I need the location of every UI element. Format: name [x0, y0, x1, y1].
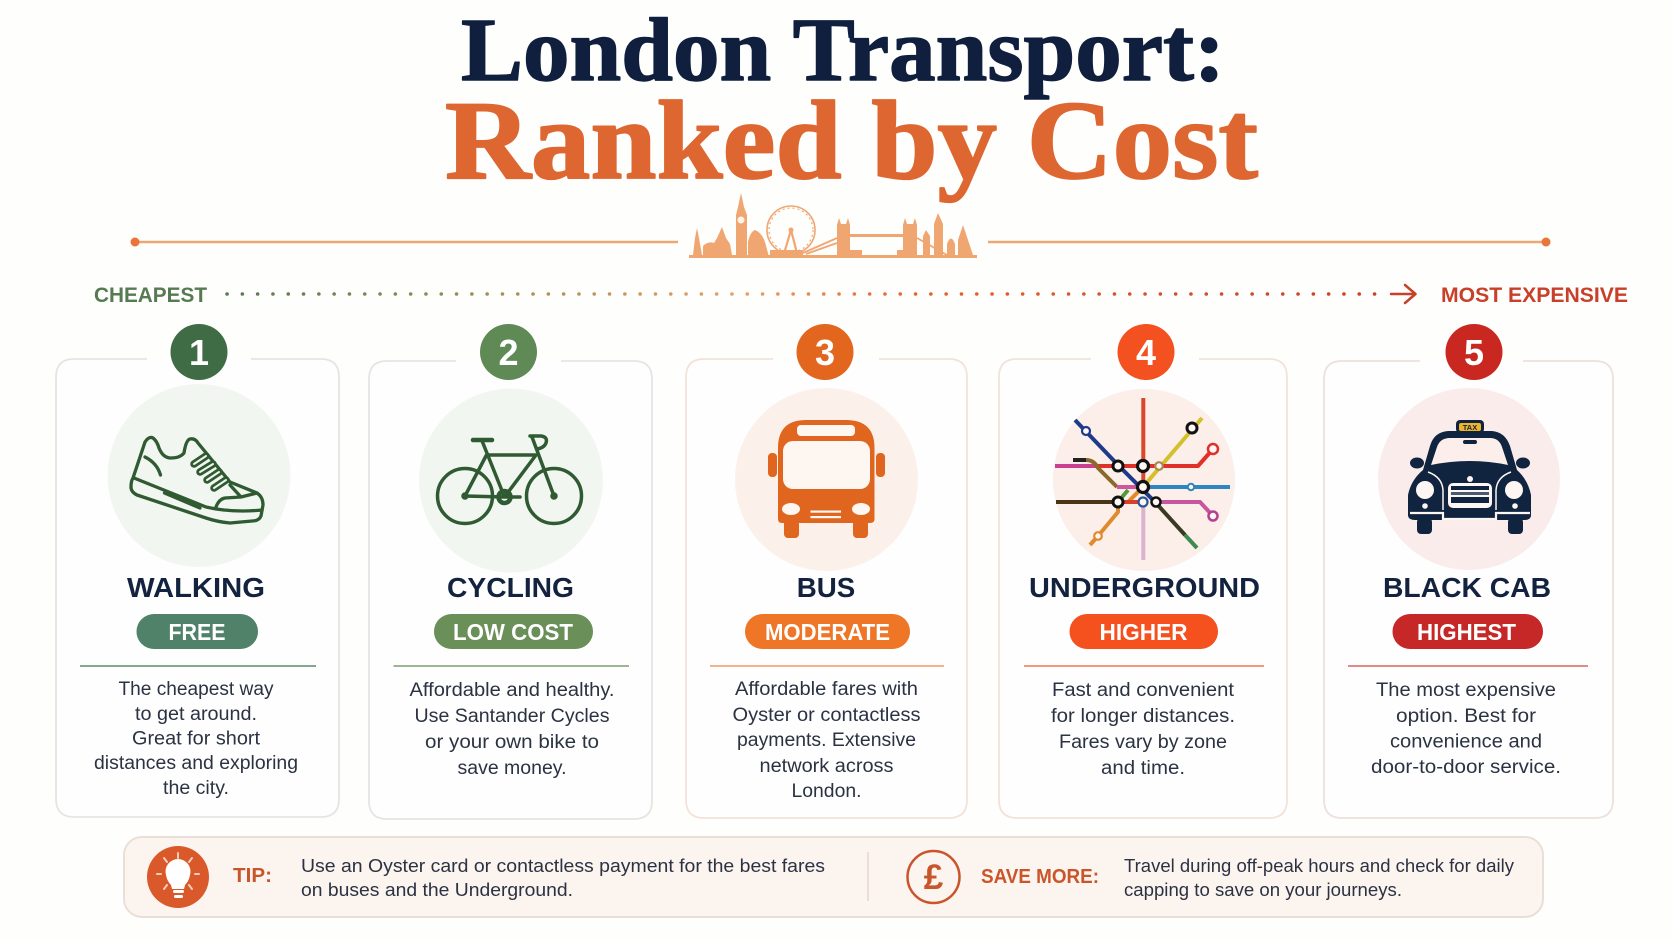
- panel: black cab: 5: [1464, 332, 1484, 373]
- icon: tube map: [1055, 398, 1230, 560]
- panel: bus: 3: [815, 332, 835, 373]
- tip text: Use an Oyster card or contactless payment for the best fares: [301, 855, 825, 876]
- icon: bus: [768, 420, 885, 538]
- panel: black cab: [1324, 324, 1613, 818]
- cost scale: CHEAPEST: [94, 283, 207, 307]
- tip text: on buses and the Underground.: [301, 879, 573, 900]
- cost pill: [745, 614, 910, 649]
- cost pill: HIGHEST: [1417, 619, 1516, 645]
- panel: walking: 1: [189, 332, 209, 373]
- panel: walking: [56, 324, 339, 817]
- cost pill: [1392, 614, 1543, 649]
- panel: tips: TIP:: [233, 865, 272, 887]
- description: option. Best for: [1396, 706, 1537, 727]
- title: London Transport:: [461, 1, 1225, 100]
- panel: cycling: 2: [498, 332, 519, 373]
- save more text: capping to save on your journeys.: [1124, 879, 1402, 900]
- cost pill: [136, 614, 258, 649]
- cost pill: [434, 614, 593, 649]
- description: or your own bike to: [425, 732, 599, 753]
- icon: taxi: [1408, 420, 1531, 534]
- description: save money.: [458, 758, 566, 779]
- description: Fares vary by zone: [1059, 732, 1227, 753]
- cost pill: [1070, 614, 1218, 649]
- icon: London skyline: [689, 193, 977, 258]
- panel: underground: 4: [1136, 332, 1156, 373]
- panel: cycling: CYCLING: [447, 572, 574, 603]
- description: Fast and convenient: [1052, 680, 1235, 701]
- description: Use Santander Cycles: [414, 706, 610, 727]
- panel: underground: [999, 324, 1287, 818]
- description: and time.: [1101, 758, 1185, 779]
- title: [445, 1, 1258, 203]
- divider with skyline: [130, 193, 1550, 258]
- panel: walking: WALKING: [127, 572, 265, 603]
- tip text: [301, 855, 825, 900]
- description: The cheapest way: [118, 679, 274, 700]
- description: door-to-door service.: [1371, 757, 1561, 778]
- description: Oyster or contactless: [732, 705, 920, 726]
- description: [732, 679, 920, 802]
- description: network across: [760, 756, 894, 777]
- panel: underground: UNDERGROUND: [1029, 572, 1260, 603]
- tube stations: [1082, 423, 1218, 540]
- description: convenience and: [1390, 732, 1542, 752]
- description: for longer distances.: [1051, 706, 1235, 727]
- cost pill: FREE: [168, 619, 226, 645]
- cost pill: LOW COST: [453, 619, 573, 645]
- cost pill: MODERATE: [765, 619, 890, 645]
- icon: taxi: TAX: [1463, 423, 1477, 432]
- panel: tips: [124, 837, 1543, 917]
- description: the city.: [163, 778, 229, 799]
- description: distances and exploring: [94, 753, 298, 774]
- icon: light bulb: [147, 846, 209, 908]
- icon: pound: £: [924, 858, 944, 897]
- icon: bicycle: [438, 436, 582, 524]
- description: London.: [792, 781, 862, 802]
- description: [94, 679, 298, 799]
- save more text: [1124, 855, 1515, 900]
- description: [1371, 680, 1561, 778]
- cost pill: HIGHER: [1100, 619, 1188, 645]
- description: Affordable fares with: [735, 679, 918, 700]
- save more text: Travel during off-peak hours and check for daily: [1124, 855, 1515, 876]
- title: Ranked by Cost: [445, 79, 1258, 203]
- panel: tips: SAVE MORE:: [981, 866, 1099, 888]
- description: The most expensive: [1376, 680, 1556, 701]
- description: Great for short: [132, 728, 261, 750]
- panel: bus: [686, 324, 967, 818]
- panel: black cab: BLACK CAB: [1383, 572, 1551, 603]
- arrow: [1391, 285, 1416, 303]
- panel: bus: BUS: [797, 572, 855, 603]
- icon: pound: [908, 851, 960, 903]
- description: [410, 680, 614, 779]
- cost scale: MOST EXPENSIVE: [1441, 283, 1628, 307]
- description: payments. Extensive: [737, 730, 916, 751]
- cost scale: [94, 283, 1628, 307]
- panel: cycling: [369, 324, 652, 819]
- description: Affordable and healthy.: [410, 680, 614, 701]
- description: to get around.: [135, 704, 257, 725]
- description: [1051, 680, 1235, 779]
- icon: shoe: [131, 438, 263, 523]
